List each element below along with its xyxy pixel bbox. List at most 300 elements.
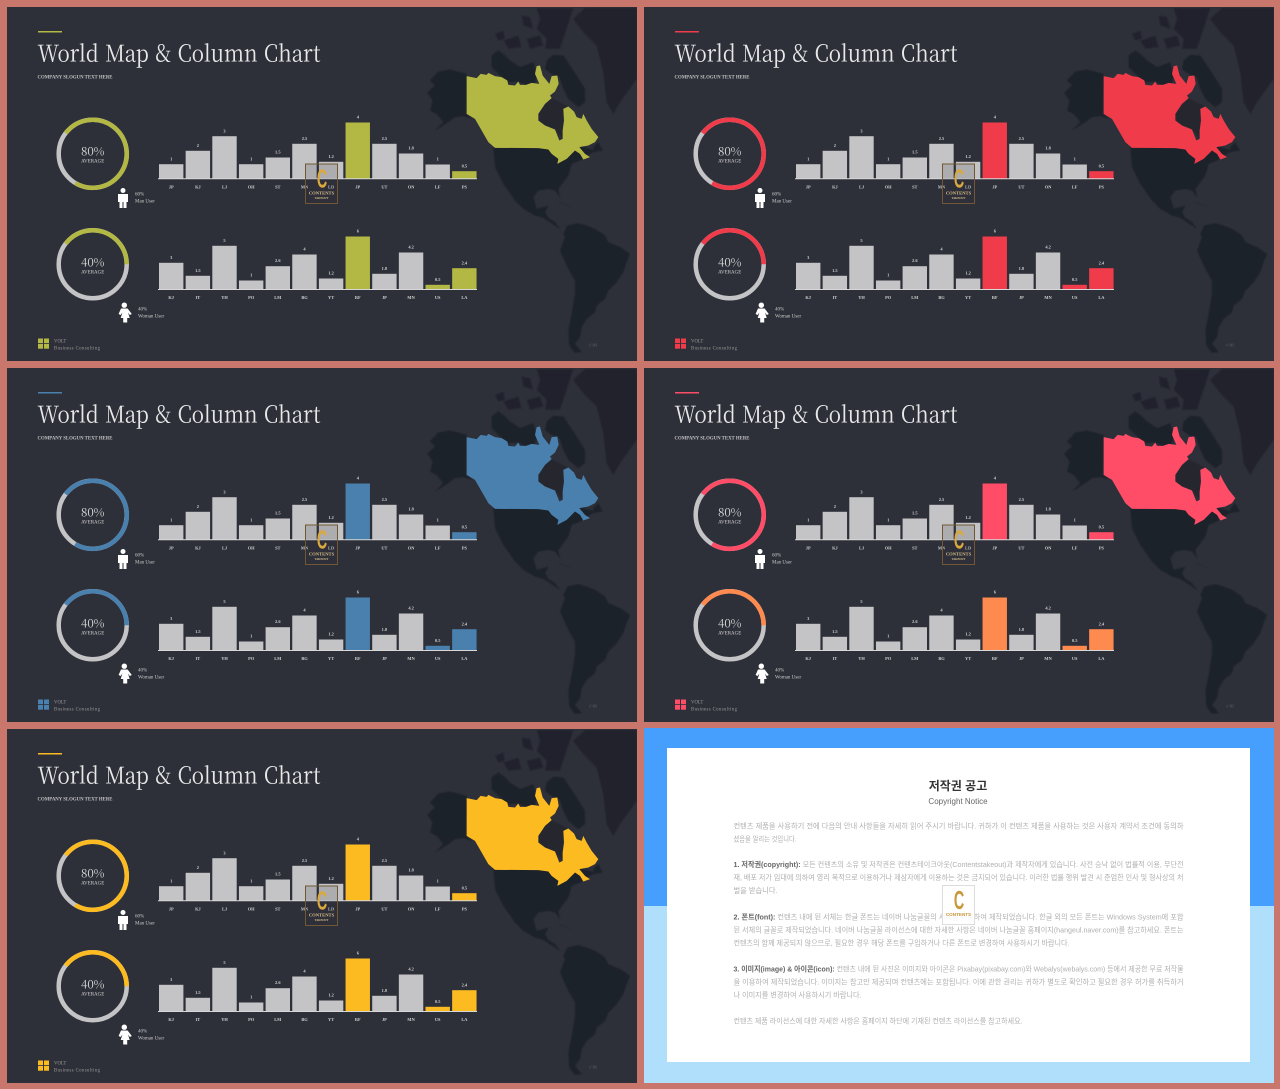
column chart: top: 1 <box>170 517 172 522</box>
column chart: top: OH <box>885 545 892 550</box>
world map <box>427 369 637 713</box>
column chart: top: 3 <box>860 128 863 133</box>
column chart: bottom: 2.4 <box>462 260 468 265</box>
column chart: top: 2 <box>834 142 836 148</box>
icon: woman user <box>119 302 132 322</box>
woman user label <box>138 307 164 319</box>
column chart: top: ST <box>275 545 281 550</box>
column chart: top: 1.2 <box>328 514 334 520</box>
column chart: bottom: 3 <box>170 976 173 982</box>
man user label: Man User <box>135 921 155 926</box>
panel: yellow slide <box>7 729 637 1083</box>
column chart: top: 1.5 <box>275 149 281 154</box>
column chart: bottom: 0.5 <box>1072 276 1078 282</box>
column chart: bottom: 1.5 <box>195 990 201 994</box>
icon: man user <box>755 548 765 568</box>
column chart: bottom: 1.8 <box>1019 626 1025 632</box>
column chart: bottom: 4.2 <box>1045 605 1051 610</box>
column chart: top: OH <box>885 184 892 189</box>
column chart: bottom: 2.6 <box>912 258 918 262</box>
column chart: top: 2 <box>834 504 836 508</box>
column chart: top: OH <box>248 545 255 550</box>
notice intro: 셨음을 알리는 것입니다. <box>734 834 796 844</box>
column chart: top: 4 <box>994 114 997 119</box>
column chart: top: JP <box>806 184 811 189</box>
column chart: top: LJ <box>859 545 865 550</box>
ring chart: 80%: 80% <box>81 143 105 159</box>
notice section 3 <box>734 964 1184 1000</box>
column chart: top: PS <box>1099 545 1105 550</box>
column chart: bottom: BG <box>301 656 308 660</box>
column chart: bottom: 3 <box>807 254 810 260</box>
ring chart: 40%: 40% <box>81 976 105 992</box>
footer logo: VOLT <box>691 339 703 344</box>
column chart: bottom: 5 <box>223 238 226 242</box>
column chart: bottom: 1.2 <box>328 270 334 275</box>
column chart: bottom: LA <box>461 1016 468 1022</box>
footer logo: Business Consulting <box>54 707 101 712</box>
man user label: Man User <box>772 199 792 204</box>
column chart: bottom: YT <box>328 656 334 660</box>
column chart: bottom: 6 <box>357 589 360 594</box>
map highlight: Canada <box>467 65 598 163</box>
column chart: bottom: BG <box>301 294 308 300</box>
footer logo <box>38 699 101 712</box>
column chart: top: 1.8 <box>408 145 415 150</box>
column chart: bottom: 1.2 <box>965 631 971 636</box>
notice section 1: 1. 저작권(copyright): 모든 컨텐츠의 소유 및 저작권은 컨텐츠테이크아웃(Contentstakeout)과 제작자에게 있습니다. 사전 승낙 없이 법률적 이용, 무단전 <box>734 859 1184 869</box>
slogan: COMPANY SLOGUN TEXT HERE <box>38 797 113 802</box>
column chart: bottom: 1.5 <box>195 268 201 272</box>
column chart: top: MN <box>301 184 309 189</box>
ring chart: 40%: 40% <box>718 615 742 631</box>
column chart: top: 1 <box>437 156 439 161</box>
column chart: bottom: 1 <box>250 272 252 277</box>
title: World Map & Column Chart <box>674 35 958 68</box>
column chart: top: LF <box>1072 184 1078 189</box>
ring chart: 80%: AVERAGE <box>718 159 741 164</box>
column chart: top: MN <box>938 184 946 189</box>
column chart: bottom: IT <box>196 1016 200 1022</box>
column chart: bottom: LM <box>274 656 282 660</box>
column chart: bottom: 1.2 <box>328 631 334 636</box>
column chart: top: 4 <box>357 475 360 480</box>
icon: man user <box>755 188 765 208</box>
page number: // 01 <box>589 1064 597 1069</box>
man user label: 60% <box>135 192 144 197</box>
column chart: bottom: 4 <box>940 246 943 251</box>
notice section 3: 을 이용하여 제작되었습니다. 이미지는 참고만 제공되며 컨텐츠에는 포함됩니다. 이에 관한 권리는 귀하가 별도로 확인하고 필요한 경우 허가를 취득하거 <box>734 976 1184 986</box>
column chart: top: UT <box>1018 545 1025 550</box>
notice section 2 <box>734 912 1184 948</box>
column chart: bottom: MN <box>407 1016 416 1022</box>
ring chart: 40% <box>59 591 127 659</box>
ring chart: 80% <box>59 119 127 187</box>
column chart: top: 2.5 <box>382 858 388 862</box>
column chart: top: JP <box>992 545 998 550</box>
watermark <box>306 524 338 564</box>
column chart: top: 2.5 <box>302 858 308 862</box>
column chart: top: 0.5 <box>462 163 468 168</box>
column chart: bottom <box>158 228 477 300</box>
column chart: bottom: 6 <box>994 589 997 594</box>
panel: red slide <box>644 7 1274 361</box>
woman user label: 40% <box>138 668 147 673</box>
column chart: bottom: 1 <box>250 994 252 999</box>
column chart: bottom: YH <box>221 1016 228 1022</box>
icon: man user <box>118 910 128 930</box>
watermark: C <box>317 165 327 193</box>
watermark <box>942 886 974 924</box>
woman user label: Woman User <box>775 675 801 680</box>
watermark <box>942 524 974 564</box>
column chart: bottom: LM <box>911 656 919 660</box>
man user label: 60% <box>772 553 781 558</box>
page number: // 01 <box>589 342 597 347</box>
footer logo: VOLT <box>54 700 66 705</box>
column chart: bottom: 0.5 <box>435 998 441 1004</box>
man user label: 60% <box>135 553 144 558</box>
notice heading: 저작권 공고 <box>929 778 987 793</box>
column chart: top: 4 <box>357 836 360 841</box>
column chart: bottom: US <box>435 656 441 660</box>
notice section 3: 3. 이미지(image) & 아이콘(icon): 컨텐츠 내에 된 사진은 이미지와 아이콘은 Pixabay(pixabay.com)와 Webalys(webalys.com) 등에서 제공한 무료 저작물 <box>734 964 1184 974</box>
watermark: TAKEOUT <box>952 558 966 560</box>
column chart: top: JP <box>355 906 361 911</box>
column chart: bottom: YT <box>965 294 971 300</box>
column chart: bottom: IT <box>833 294 837 300</box>
column chart: bottom: 1.5 <box>832 628 838 634</box>
watermark: TAKEOUT <box>315 196 329 200</box>
column chart: bottom: YH <box>221 294 228 300</box>
column chart: top: ST <box>912 545 918 550</box>
title: World Map & Column Chart <box>38 757 321 790</box>
icon: man user <box>118 188 128 208</box>
column chart: bottom: YT <box>328 294 334 300</box>
column chart: bottom: MN <box>1044 294 1053 300</box>
panel: olive slide <box>7 7 637 361</box>
column chart: top: ON <box>408 545 415 550</box>
column chart: top: UT <box>381 545 388 550</box>
column chart: top <box>158 475 477 550</box>
column chart: top: 1.8 <box>1045 506 1052 511</box>
column chart: top: 1.5 <box>275 510 281 515</box>
column chart: bottom: 2.6 <box>275 980 281 984</box>
column chart: top: 1 <box>887 517 889 522</box>
woman user label <box>775 668 801 680</box>
man user label <box>772 553 792 565</box>
ring chart: 40%: 40% <box>81 254 105 270</box>
column chart: top: 1 <box>437 878 439 883</box>
footer logo: Business Consulting <box>691 346 738 351</box>
column chart: top: LD <box>965 545 971 550</box>
column chart: top: UT <box>1018 184 1025 189</box>
column chart: top: PS <box>462 184 468 189</box>
column chart: bottom: 2.4 <box>1099 621 1105 626</box>
column chart: bottom: 6 <box>357 228 360 233</box>
column chart: top: JP <box>355 184 361 189</box>
column chart: top: KJ <box>832 184 839 189</box>
column chart: bottom: LA <box>1098 294 1105 300</box>
man user label <box>135 192 155 204</box>
world map <box>427 730 637 1074</box>
watermark: CONTENTS <box>946 551 972 556</box>
column chart: bottom: 5 <box>860 598 863 604</box>
column chart: top: 1 <box>807 156 809 161</box>
column chart: top <box>795 475 1114 550</box>
column chart: bottom: JP <box>382 1016 387 1022</box>
column chart: top: KJ <box>195 906 202 911</box>
notice intro: 컨텐츠 제품을 사용하기 전에 다음의 안내 사항들을 자세히 읽어 주시기 바랍니다. 귀하가 이 컨텐츠 제품을 사용하는 것은 사용자 계약서 조건에 동의하 <box>734 820 1184 830</box>
ring chart: 80%: AVERAGE <box>718 520 741 525</box>
column chart: bottom: MN <box>1044 656 1053 660</box>
notice intro <box>734 820 1184 844</box>
column chart: bottom <box>795 228 1114 300</box>
woman user label: 40% <box>138 307 147 312</box>
panel: pink and orange slide <box>644 368 1274 722</box>
ring chart: 80%: AVERAGE <box>81 520 104 525</box>
woman user label <box>138 1029 164 1041</box>
man user label: 60% <box>135 914 144 919</box>
column chart: top: ST <box>275 184 281 189</box>
footer logo <box>675 338 738 351</box>
ring chart: 80%: 80% <box>718 504 742 520</box>
column chart: top: 1.2 <box>965 154 971 158</box>
man user label <box>135 914 155 926</box>
woman user label: Woman User <box>138 314 164 319</box>
notice section 2: 된 서체의 글꼴로 제작되었습니다. 네이버 나눔글꼴 라이선스에 대한 자세한 사항은 네이버 나눔글꼴 홈페이지(hangeul.naver.com)를 참고하세요. 폰트는 <box>734 924 1184 934</box>
column chart: top: KJ <box>195 184 202 189</box>
column chart: top: LF <box>435 545 441 550</box>
ring chart: 80% <box>696 119 764 187</box>
column chart: top: OH <box>248 906 255 911</box>
column chart: top: LF <box>435 184 441 189</box>
world map <box>1064 8 1274 352</box>
column chart: bottom: BG <box>301 1016 308 1022</box>
column chart: top: 0.5 <box>462 885 468 890</box>
footer logo <box>675 699 738 712</box>
column chart: bottom: US <box>1072 294 1078 300</box>
column chart: bottom: YT <box>328 1016 334 1022</box>
column chart: top: LD <box>328 545 334 550</box>
notice section 2: 컨텐츠의 함께 제공되지 않으므로, 필요한 경우 해당 폰트를 구입하거나 다른 폰트로 변경하여 사용하시기 바랍니다. <box>734 938 1070 948</box>
title: World Map & Column Chart <box>674 396 958 429</box>
column chart: top: JP <box>169 545 174 550</box>
column chart: top: JP <box>169 906 174 911</box>
notice section 1: 벌을 받습니다. <box>734 885 778 895</box>
column chart: bottom: 4 <box>303 968 306 973</box>
title: World Map & Column Chart <box>38 396 321 429</box>
column chart: bottom: PO <box>248 656 255 660</box>
column chart: bottom: 4.2 <box>408 966 414 971</box>
column chart: bottom: 2.4 <box>1099 260 1105 265</box>
page number: // 01 <box>1226 342 1234 347</box>
column chart: bottom <box>158 589 477 660</box>
map highlight: Canada <box>467 787 598 885</box>
column chart: bottom: 1 <box>250 633 252 638</box>
icon: woman user <box>119 1024 132 1044</box>
column chart: top: 2.5 <box>302 496 308 502</box>
woman user label <box>138 668 164 680</box>
column chart: bottom: YH <box>858 294 865 300</box>
column chart: bottom: 6 <box>994 228 997 233</box>
panel: copyright notice <box>644 728 1274 1083</box>
ring chart: 40% <box>696 230 764 298</box>
man user label: Man User <box>135 199 155 204</box>
icon: woman user <box>756 663 769 683</box>
watermark <box>306 164 338 203</box>
notice section 2: 2. 폰트(font): 컨텐츠 내에 된 서체는 한글 폰트는 네이버 나눔글꼴의 서체를 이용하여 제작되었습니다. 한글 외의 모든 폰트는 Windows System에 포함 <box>734 912 1184 922</box>
column chart: top: JP <box>355 545 361 550</box>
footer logo <box>38 1060 101 1073</box>
watermark: C <box>954 165 964 193</box>
column chart: top: LJ <box>222 184 228 189</box>
ring chart: 80%: AVERAGE <box>81 881 104 886</box>
footer logo: VOLT <box>691 700 703 705</box>
column chart: top: 4 <box>994 475 997 480</box>
ring chart: 40% <box>696 591 764 659</box>
column chart: top: LJ <box>859 184 865 189</box>
ring chart: 40%: 40% <box>718 254 742 270</box>
column chart: bottom: LA <box>461 656 468 660</box>
column chart: bottom: 4 <box>303 607 306 612</box>
column chart: bottom: 1.8 <box>382 266 388 270</box>
ring chart: 80%: 80% <box>81 865 105 881</box>
column chart: bottom: 4 <box>940 607 943 612</box>
column chart: bottom: PO <box>248 1016 255 1022</box>
column chart: bottom: 1.8 <box>382 988 388 992</box>
column chart: bottom: 1.8 <box>382 626 388 632</box>
man user label <box>135 553 155 565</box>
watermark: TAKEOUT <box>952 196 966 200</box>
watermark: C <box>317 526 327 554</box>
ring chart: 40%: AVERAGE <box>81 631 104 636</box>
notice section 1 <box>734 859 1184 895</box>
column chart: top: 3 <box>223 850 226 855</box>
column chart: bottom: 0.5 <box>435 276 441 282</box>
watermark: C <box>954 887 964 915</box>
notice subheading: Copyright Notice <box>928 797 988 806</box>
column chart: top: KJ <box>832 545 839 550</box>
column chart: top: 2.5 <box>382 136 388 140</box>
ring chart: 80% <box>59 480 127 548</box>
ring chart: 40%: AVERAGE <box>718 270 741 275</box>
column chart: top: ON <box>408 906 415 911</box>
footer logo: VOLT <box>54 1061 66 1066</box>
column chart: top: 1.8 <box>408 867 415 872</box>
page number: // 01 <box>589 703 597 708</box>
column chart: bottom: 1.2 <box>965 270 971 275</box>
man user label <box>772 192 792 204</box>
column chart: bottom: IT <box>833 656 837 660</box>
column chart: bottom: 1.8 <box>1019 266 1025 270</box>
watermark: C <box>954 526 964 554</box>
watermark: CONTENTS <box>309 912 335 917</box>
column chart: top: PS <box>462 545 468 550</box>
column chart: top: 3 <box>860 489 863 494</box>
man user label: Man User <box>135 560 155 565</box>
column chart: bottom: 0.5 <box>1072 638 1078 642</box>
watermark: CONTENTS <box>946 190 972 195</box>
column chart: top: 2.5 <box>939 136 945 140</box>
icon: woman user <box>756 302 769 322</box>
column chart: bottom: 1.2 <box>328 992 334 997</box>
column chart: top: 1.2 <box>328 876 334 880</box>
column chart: top: 2.5 <box>939 496 945 502</box>
column chart: top: 1.5 <box>912 510 918 515</box>
slogan: COMPANY SLOGUN TEXT HERE <box>38 436 113 441</box>
ring chart: 80%: 80% <box>718 143 742 159</box>
column chart: bottom: KJ <box>805 656 812 660</box>
column chart: bottom: 1 <box>887 272 889 277</box>
column chart: top: MN <box>938 545 946 550</box>
column chart: bottom: 2.6 <box>912 618 918 624</box>
column chart: top: LD <box>328 184 334 189</box>
column chart: bottom: KJ <box>805 294 812 300</box>
column chart: top: JP <box>806 545 811 550</box>
column chart: top: LD <box>328 906 334 911</box>
column chart: bottom: PO <box>885 294 892 300</box>
column chart: bottom: 6 <box>357 950 360 955</box>
column chart: bottom: YT <box>965 656 971 660</box>
column chart: bottom: YH <box>858 656 865 660</box>
column chart: top <box>158 836 477 911</box>
footer logo: Business Consulting <box>54 1068 101 1073</box>
column chart: bottom: US <box>435 294 441 300</box>
column chart: bottom: 5 <box>223 960 226 964</box>
column chart: bottom: 1.5 <box>832 268 838 272</box>
column chart: bottom <box>795 589 1114 660</box>
column chart: top: ON <box>1045 545 1052 550</box>
column chart: top: 3 <box>223 489 226 494</box>
column chart: bottom: JP <box>382 294 387 300</box>
notice section 3: 나 이미지를 변경하여 사용하시기 바랍니다. <box>734 990 862 1000</box>
column chart: bottom: BG <box>938 294 945 300</box>
column chart: bottom: IT <box>196 294 200 300</box>
column chart: bottom: 4.2 <box>408 244 414 249</box>
icon: man user <box>118 548 128 568</box>
column chart: top: 1 <box>170 156 172 161</box>
column chart: top: 4 <box>357 114 360 119</box>
column chart: bottom: YH <box>221 656 228 660</box>
column chart: bottom: LM <box>274 1016 282 1022</box>
column chart: bottom: LA <box>1098 656 1105 660</box>
column chart: top: 1 <box>170 878 172 883</box>
watermark: CONTENTS <box>309 551 335 556</box>
column chart: bottom: BG <box>938 656 945 660</box>
column chart: top: ON <box>1045 184 1052 189</box>
watermark: TAKEOUT <box>315 558 329 560</box>
column chart: top: 3 <box>223 128 226 133</box>
column chart: top: LF <box>435 906 441 911</box>
column chart: bottom: MN <box>407 294 416 300</box>
column chart: top: KJ <box>195 545 202 550</box>
ring chart: 40%: AVERAGE <box>81 992 104 997</box>
ring chart: 80%: AVERAGE <box>81 159 104 164</box>
column chart: top: 1.8 <box>1045 145 1052 150</box>
column chart: top: PS <box>1099 184 1105 189</box>
column chart: top: 1 <box>250 517 252 522</box>
column chart: top: 1 <box>250 878 252 883</box>
column chart: top: 2 <box>197 864 199 870</box>
column chart: top <box>158 114 477 189</box>
column chart: bottom: LA <box>461 294 468 300</box>
footer logo: Business Consulting <box>691 707 738 712</box>
column chart: top: LD <box>965 184 971 189</box>
column chart: top: PS <box>462 906 468 911</box>
column chart: bottom: IT <box>196 656 200 660</box>
column chart: bottom: PO <box>248 294 255 300</box>
